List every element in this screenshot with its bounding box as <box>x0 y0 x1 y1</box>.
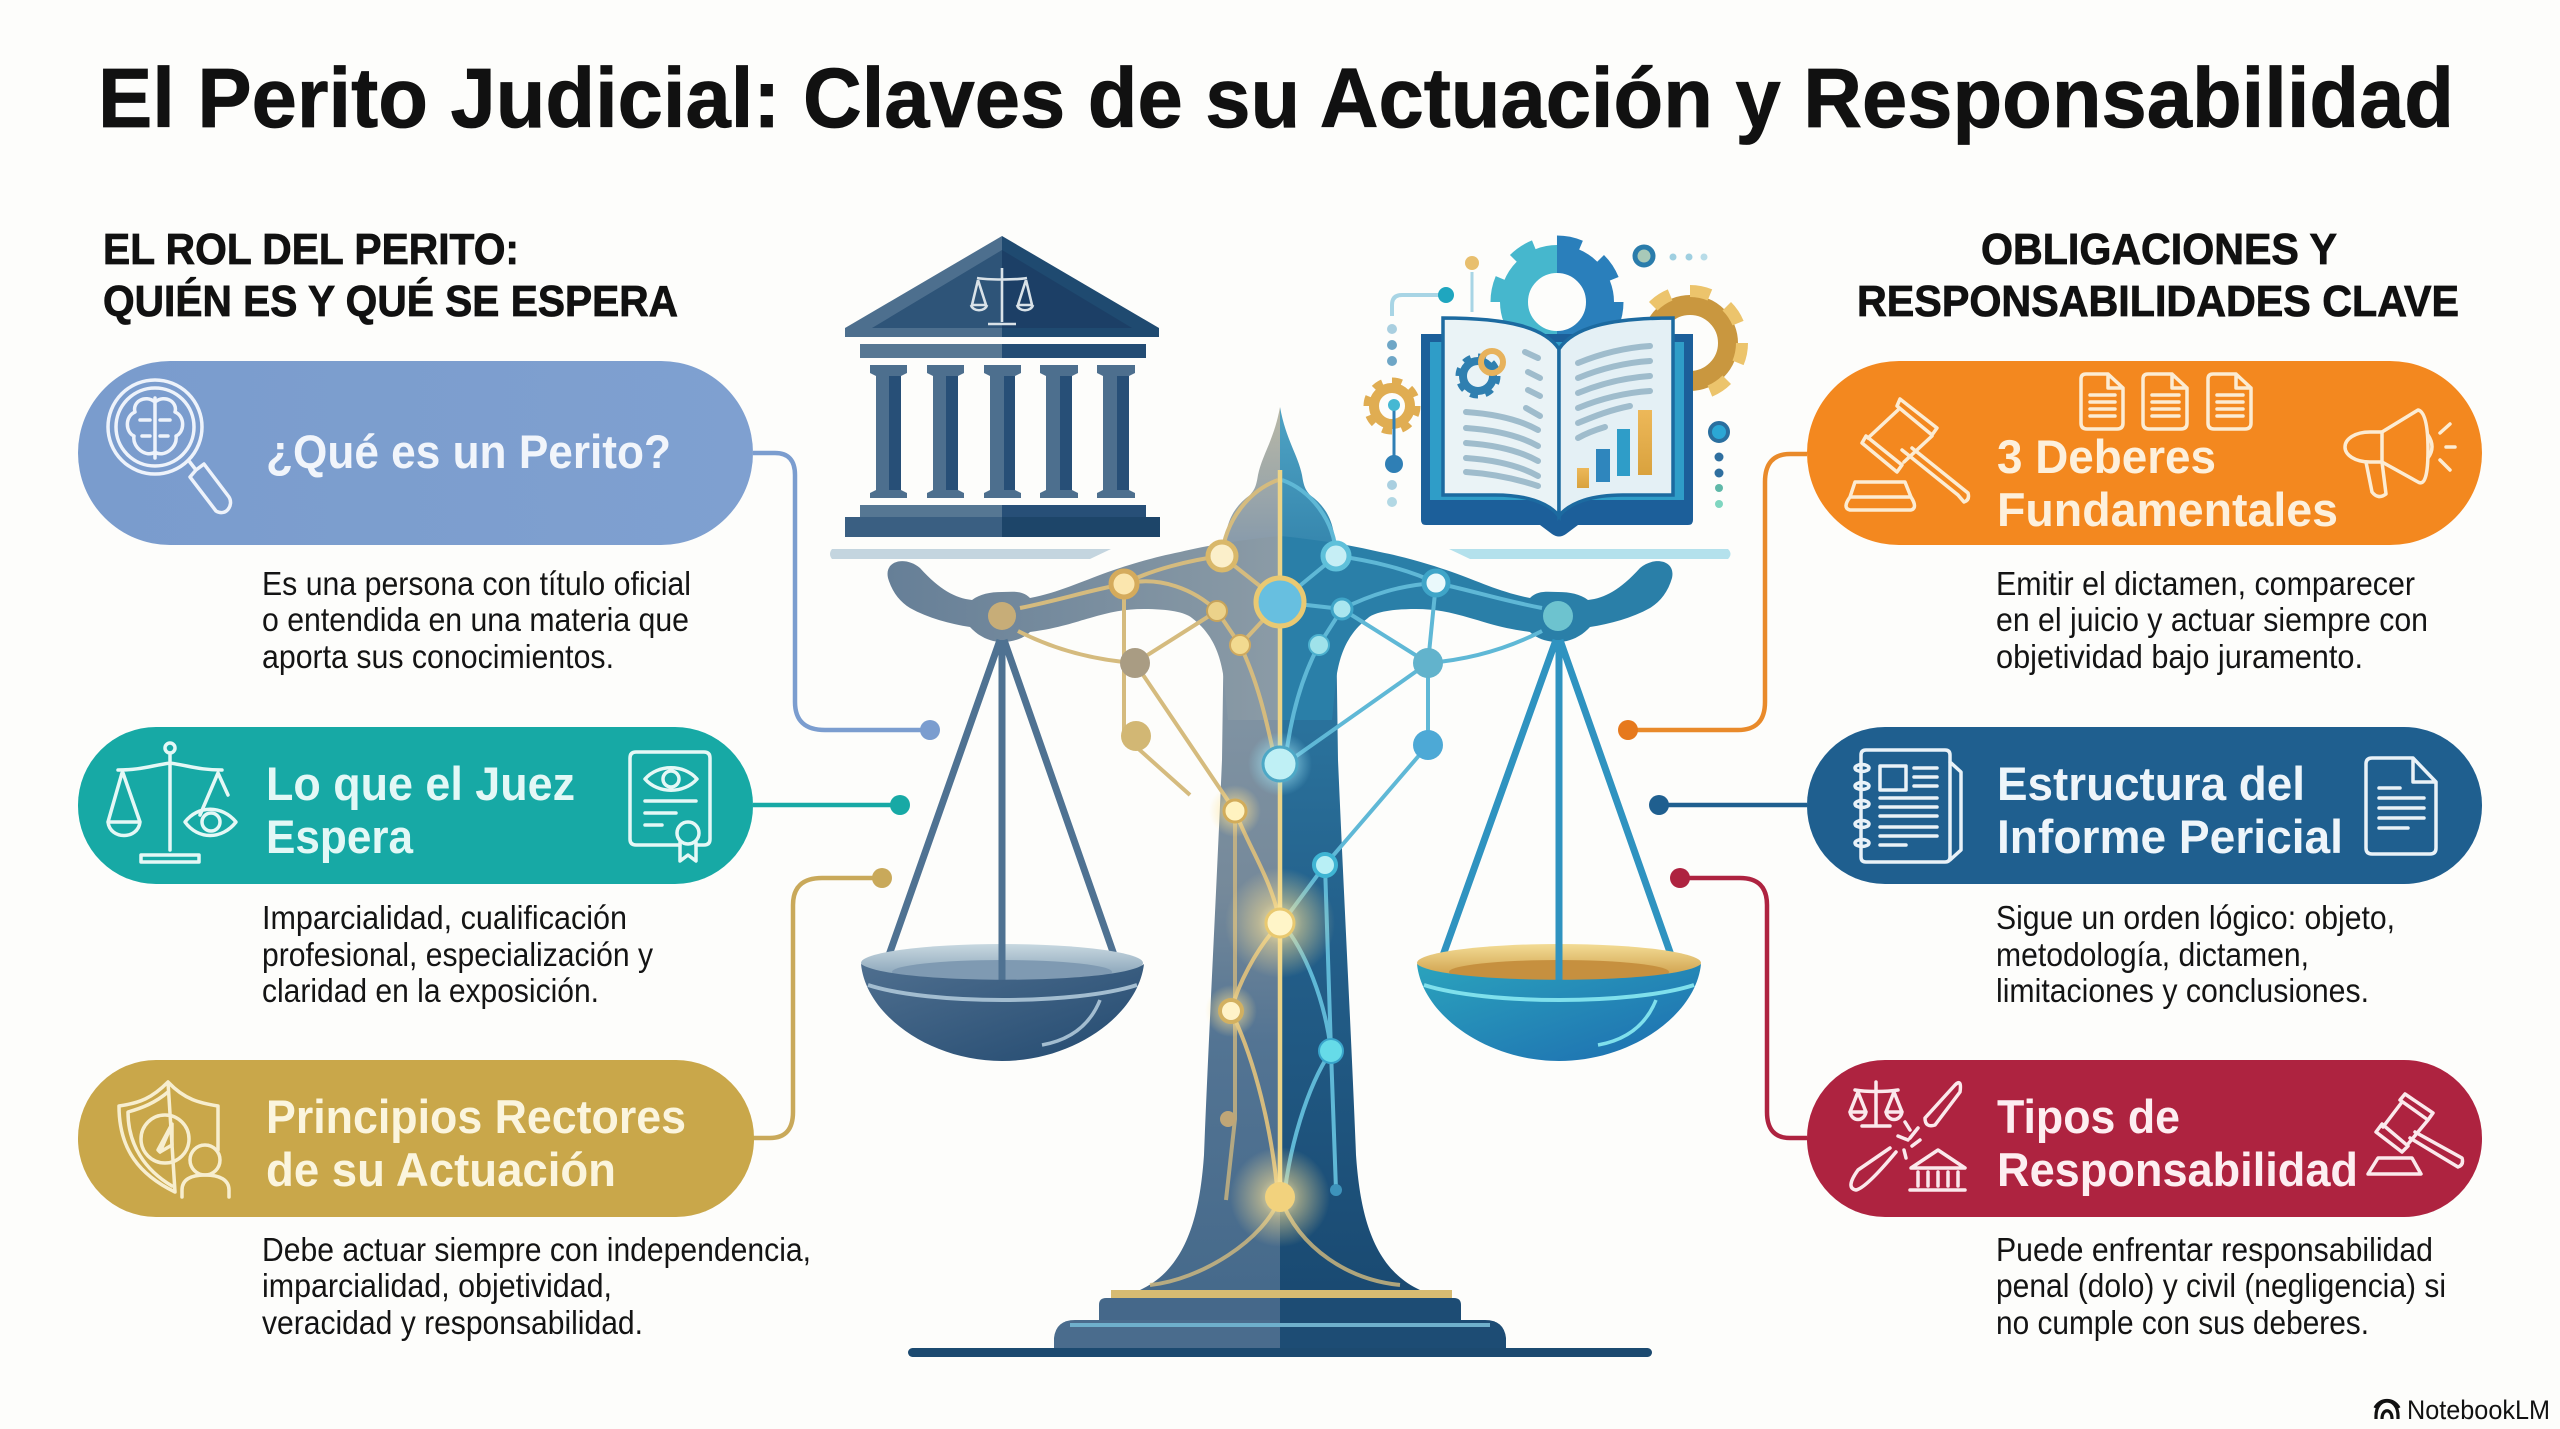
central scale of justice <box>861 407 1701 1357</box>
gear: gold right <box>1638 291 1742 395</box>
panel: tipos de responsabilidad <box>1807 1060 2482 1217</box>
text: lo que el juez espera: claridad en la exposición. <box>262 972 599 1009</box>
text: tipos de responsabilidad: Puede enfrentar responsabilidad <box>1996 1231 2433 1268</box>
title: El Perito Judicial: Claves de su Actuación y Responsabilidad <box>98 51 2454 145</box>
panel: que es un perito <box>78 361 753 545</box>
icon: gavel <box>2368 1094 2462 1174</box>
icon: notebook <box>1855 750 1961 862</box>
connector: tipos de responsabilidad <box>1670 868 1807 1138</box>
text: 3 deberes: objetividad bajo juramento. <box>1996 638 2363 675</box>
text: tipos de responsabilidad <box>1996 1231 2446 1341</box>
text: principios rectores <box>262 1231 811 1341</box>
label: 3 Deberes <box>1997 430 2216 483</box>
left pan chains <box>883 640 1120 982</box>
beam right <box>1280 536 1672 720</box>
label: Informe Pericial <box>1997 810 2343 863</box>
text: principios rectores: imparcialidad, objetividad, <box>262 1267 612 1304</box>
network: gold side <box>1018 480 1400 1285</box>
heading: obligaciones y responsabilidades <box>1857 225 2459 326</box>
connector: estructura <box>1649 795 1807 815</box>
label: Lo que el Juez <box>266 757 575 810</box>
text: estructura del informe <box>1996 899 2395 1009</box>
label: Principios Rectores <box>266 1090 686 1143</box>
icon: shield, compass and person <box>119 1082 229 1197</box>
text: que es un perito: o entendida en una materia que <box>262 601 689 638</box>
label <box>266 757 575 863</box>
heading: obligaciones y responsabilidades: RESPONSABILIDADES CLAVE <box>1857 277 2459 326</box>
watermark: notebooklm: NotebookLM <box>2407 1395 2550 1425</box>
heading: obligaciones y responsabilidades: OBLIGACIONES Y <box>1981 225 2337 274</box>
heading: el rol del perito: EL ROL DEL PERITO: <box>103 225 519 274</box>
gear: small gold <box>1367 381 1417 473</box>
icon: small scale on pediment <box>971 268 1033 324</box>
text: que es un perito: Es una persona con título oficial <box>262 565 691 602</box>
network nodes <box>1111 542 1448 1212</box>
text: tipos de responsabilidad: no cumple con sus deberes. <box>1996 1304 2369 1341</box>
column right half <box>1280 407 1420 1290</box>
label <box>1997 1090 2358 1196</box>
connector: principios rectores <box>753 868 892 1138</box>
icon: gavel <box>1846 399 1968 510</box>
pivots <box>988 602 1016 630</box>
label: Responsabilidad <box>1997 1143 2358 1196</box>
panel: lo que el juez espera <box>78 727 753 884</box>
label: Estructura del <box>1997 757 2305 810</box>
column left half <box>1140 407 1280 1290</box>
label: ¿Qué es un Perito? <box>266 425 671 478</box>
panel: estructura del informe <box>1807 727 2482 884</box>
text: lo que el juez espera: profesional, especialización y <box>262 936 653 973</box>
glows <box>1205 732 1335 1247</box>
icon: certificate with eye <box>630 752 710 861</box>
label <box>1997 757 2343 863</box>
label: Fundamentales <box>1997 483 2338 536</box>
icon: open book with gears <box>1367 242 1742 536</box>
text: 3 deberes: Emitir el dictamen, comparecer <box>1996 565 2415 602</box>
text: principios rectores: veracidad y responsabilidad. <box>262 1304 643 1341</box>
connector: 3 deberes <box>1618 454 1807 740</box>
network: blue side <box>1280 480 1542 1190</box>
beam left <box>888 536 1280 720</box>
icon: scale and eye <box>108 743 236 862</box>
text: 3 deberes: en el juicio y actuar siempre con <box>1996 601 2428 638</box>
text: lo que el juez espera <box>262 899 653 1009</box>
connectors <box>753 453 1807 1138</box>
text: principios rectores: Debe actuar siempre con independencia, <box>262 1231 811 1268</box>
right pan chains <box>1437 640 1677 982</box>
gear: large blue <box>1497 242 1617 362</box>
text: que es un perito: aporta sus conocimientos. <box>262 638 614 675</box>
text: 3 deberes <box>1996 565 2428 675</box>
shelf left <box>830 549 1111 559</box>
label: Tipos de <box>1997 1090 2180 1143</box>
icon: megaphone <box>2345 410 2455 497</box>
icon: document <box>2366 758 2436 854</box>
connector: que es un perito <box>753 453 940 740</box>
base <box>908 1290 1652 1357</box>
decorative nodes <box>1387 247 1728 508</box>
text: estructura del informe: limitaciones y conclusiones. <box>1996 972 2369 1009</box>
text: lo que el juez espera: Imparcialidad, cualificación <box>262 899 627 936</box>
label: Espera <box>266 810 414 863</box>
icon: courthouse <box>845 236 1160 537</box>
left pan <box>861 640 1144 1061</box>
text: estructura del informe: Sigue un orden lógico: objeto, <box>1996 899 2395 936</box>
icon: scale, broken chain and courthouse <box>1850 1082 1965 1190</box>
icon: magnifier with brain <box>108 380 231 513</box>
center line <box>1278 470 1282 1197</box>
heading: el rol del perito <box>103 225 678 326</box>
text: estructura del informe: metodología, dictamen, <box>1996 936 2309 973</box>
text: que es un perito <box>262 565 691 675</box>
label <box>1997 430 2338 536</box>
connector: lo que el juez espera <box>753 795 910 815</box>
icon: three documents <box>2081 374 2251 429</box>
label: de su Actuación <box>266 1143 616 1196</box>
book pages <box>1443 318 1673 516</box>
text: tipos de responsabilidad: penal (dolo) y civil (negligencia) si <box>1996 1267 2446 1304</box>
label <box>266 1090 686 1196</box>
shelf right <box>1449 549 1730 559</box>
book cover <box>1421 334 1693 536</box>
left page content <box>1458 351 1540 486</box>
right pan <box>1417 640 1701 1061</box>
right page content and bar chart <box>1577 346 1652 488</box>
panel: principios rectores <box>78 1060 754 1217</box>
panel: 3 deberes <box>1807 361 2482 545</box>
heading: el rol del perito: QUIÉN ES Y QUÉ SE ESPERA <box>103 276 678 326</box>
